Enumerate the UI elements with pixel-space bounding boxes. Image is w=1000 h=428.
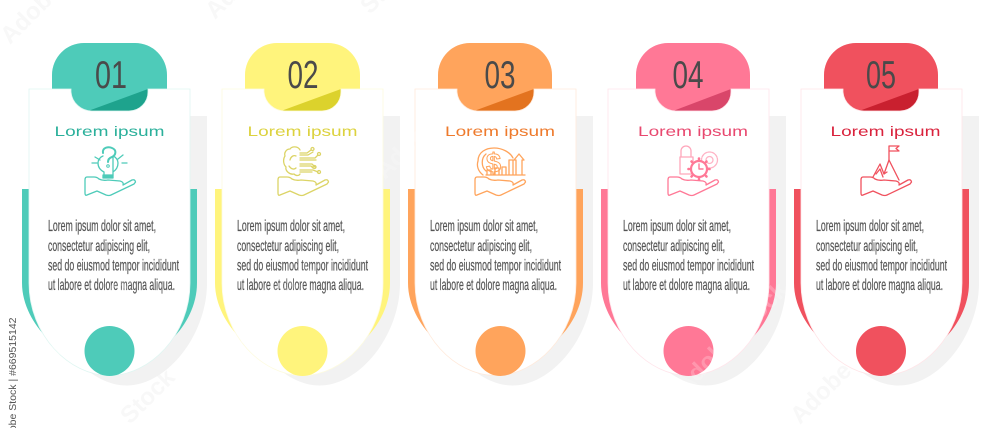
title 03: Lorem ipsum [445,123,555,139]
icon: mountain flag on hand [861,146,912,196]
tab 04 [636,43,750,111]
panel: step 01 [22,43,207,386]
watermark overlay: Adobe [370,112,442,184]
icon: idea bulb on hand [85,147,136,196]
description 04: consectetur adipiscing elit, [623,238,725,255]
icon: money growth on hand: $ [486,148,501,178]
watermark: Adobe [785,357,857,428]
watermark overlay: Adobe Stock [210,241,333,364]
number 04: 04 [672,54,704,97]
number 02: 02 [288,54,318,97]
tab 03 [438,43,552,111]
watermark: Stock [115,363,181,428]
title 05: Lorem ipsum [830,123,940,139]
description 03: consectetur adipiscing elit, [430,238,532,255]
description 02: Lorem ipsum dolor sit amet, [237,218,345,235]
watermark overlay [15,112,793,399]
icon: digital brain on hand [278,147,328,196]
panel: step 02 [215,43,400,386]
marker circle 04 [664,326,714,376]
description 05 [816,218,947,294]
marker circle 03 [476,326,526,376]
title 01: Lorem ipsum [54,123,164,139]
panel: step 05 [794,43,979,386]
description 01: sed do eiusmod tempor incididunt [48,258,179,274]
watermark overlay: Adobe Stock [670,276,793,399]
description 04 [623,218,754,294]
tab 02 [245,43,360,111]
title 02: Lorem ipsum [248,123,358,139]
description 01: Lorem ipsum dolor sit amet, [48,218,156,235]
description 04: Lorem ipsum dolor sit amet, [623,218,731,235]
number 03: 03 [484,54,516,97]
description 03 [430,218,561,294]
title 04: Lorem ipsum [638,123,748,139]
description 01: consectetur adipiscing elit, [48,238,150,255]
tab 05 [824,43,938,111]
panel: step 03 [408,43,593,386]
icon: money growth on hand [475,148,526,196]
description 02 [237,218,368,294]
number 05: 05 [866,54,896,97]
description 02: consectetur adipiscing elit, [237,238,339,255]
watermark overlay: Adobe Stock [15,266,138,389]
description 03: sed do eiusmod tempor incididunt [430,258,561,274]
tab 01 [52,43,167,111]
marker circle 02 [278,326,328,376]
panel: step 04 [601,43,786,386]
description 05: consectetur adipiscing elit, [816,238,918,255]
marker circle 05 [856,326,906,376]
number 01: 01 [95,54,127,97]
description 03: Lorem ipsum dolor sit amet, [430,218,538,235]
marker circle 01 [84,326,134,376]
description 04: sed do eiusmod tempor incididunt [623,258,754,274]
description 03: ut labore et dolore magna aliqua. [430,277,557,294]
description 02: sed do eiusmod tempor incididunt [237,258,368,274]
description 01: ut labore et dolore magna aliqua. [48,277,175,294]
description 04: ut labore et dolore magna aliqua. [623,277,750,294]
icon: lock clock gear on hand [668,146,718,196]
description 01 [48,218,179,294]
description 02: ut labore et dolore magna aliqua. [237,277,364,294]
